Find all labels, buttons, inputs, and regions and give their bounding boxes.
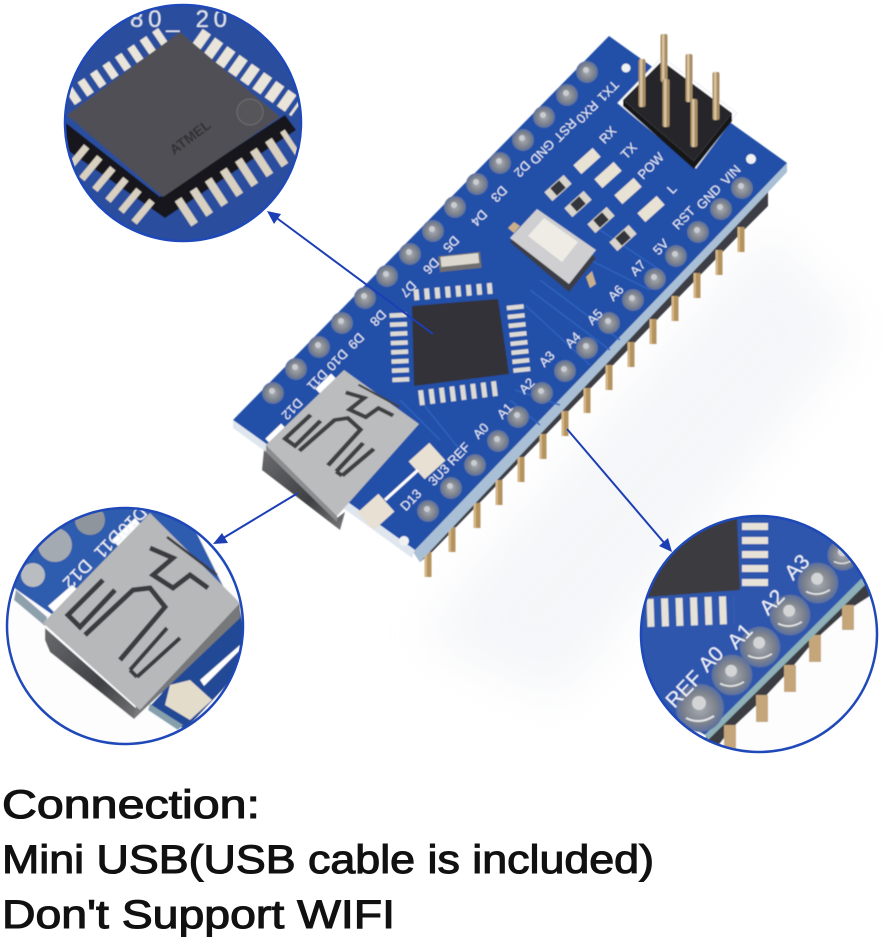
leg shadows	[60, 115, 296, 218]
top row pin labels: D3	[488, 183, 510, 205]
bottom row pin labels: A1	[494, 400, 516, 422]
bottom row pin labels: RST	[669, 203, 698, 232]
top row pin labels: TX1	[595, 77, 622, 105]
legs	[75, 142, 293, 219]
bottom row pin labels: A4	[562, 329, 584, 351]
bottom row pin labels: A3	[536, 348, 558, 370]
board top	[233, 36, 787, 550]
solder holes	[38, 528, 72, 562]
top row pin labels: D2	[511, 158, 533, 180]
white background	[14, 533, 242, 730]
LEDs	[573, 148, 665, 222]
white pad marks	[47, 584, 77, 612]
reset button	[508, 209, 596, 292]
bottom row pin labels: D13	[397, 486, 424, 514]
top row pin labels: RST	[551, 116, 580, 145]
connector front	[45, 628, 140, 719]
board side edge	[412, 163, 787, 562]
chip marking: ATMEL	[166, 116, 214, 158]
labels: A3	[780, 550, 815, 585]
LED labels: RX	[596, 123, 620, 147]
Nano board photo	[233, 34, 787, 577]
main chip	[412, 299, 509, 386]
labels: REF	[661, 666, 707, 713]
circle outline	[65, 5, 301, 241]
chip dent	[237, 99, 263, 125]
bottom row pin labels: 5V	[650, 236, 672, 258]
lower right board edge and solder tab	[150, 610, 242, 728]
bottom row pin labels: GND	[693, 181, 724, 212]
LED labels	[596, 123, 680, 197]
pad rows	[70, 35, 297, 108]
top row pin labels: D10	[324, 346, 351, 374]
bottom row pin labels: 3U3	[425, 461, 452, 489]
circle outline	[7, 508, 243, 744]
arrow: pins to right circle	[567, 429, 672, 552]
pin housing	[412, 178, 768, 562]
top row pin labels: D8	[367, 307, 389, 329]
circle: USB detail	[6, 506, 244, 746]
edge stripe	[705, 577, 868, 740]
circle outline	[641, 516, 877, 752]
bottom row pin labels: A7	[627, 257, 649, 279]
labels: D10	[114, 502, 151, 540]
top row pin labels: D7	[397, 278, 419, 300]
circle: chip detail	[60, 0, 310, 245]
arrow: chip to top-left circle	[267, 211, 433, 334]
pin legs	[724, 605, 854, 750]
caption line 3: Don't Support WIFI	[2, 893, 395, 937]
top row solder holes	[262, 61, 598, 404]
board top	[14, 509, 224, 694]
labels	[661, 550, 815, 713]
traces	[400, 230, 660, 450]
top row pin labels: GND	[527, 137, 558, 168]
LED labels: TX	[618, 139, 640, 162]
chip	[640, 518, 740, 597]
circle: pins detail	[630, 510, 883, 760]
connector slots	[68, 537, 217, 677]
crystal	[438, 252, 482, 272]
bottom row pin labels: A0	[470, 420, 492, 442]
labels: A1	[723, 619, 758, 654]
top row pin labels: D5	[440, 233, 462, 255]
board silkscreen text: 80_ 20	[130, 6, 227, 33]
6-pin header	[618, 34, 737, 169]
pads	[647, 523, 755, 613]
caption line 2: Mini USB(USB cable is included)	[2, 838, 654, 882]
USB connector	[262, 370, 445, 530]
bottom row pin labels: A6	[605, 282, 627, 304]
board shadow	[420, 230, 860, 700]
main chip pads	[398, 288, 522, 398]
caption line 1: Connection:	[2, 783, 260, 827]
labels: A2	[755, 585, 790, 620]
chip body	[67, 32, 280, 197]
top row pin labels: D6	[420, 255, 442, 277]
LED labels: L	[664, 181, 680, 197]
LED labels: POW	[635, 149, 667, 182]
arrow: USB to left circle	[213, 493, 298, 544]
caption text	[2, 783, 654, 937]
top row pin labels	[279, 77, 622, 423]
solder holes	[676, 684, 724, 732]
resistors	[544, 175, 637, 251]
top row pin labels: D12	[279, 395, 306, 423]
top row pin labels: D9	[345, 330, 367, 352]
labels: D12	[59, 555, 96, 593]
circuit board background	[66, 6, 300, 240]
top row pin labels: D4	[468, 207, 490, 229]
labels: D11	[90, 526, 127, 563]
bottom row solder holes	[417, 177, 753, 522]
bottom row pin labels	[397, 162, 744, 514]
top row pin labels: D11	[304, 367, 331, 394]
labels: A0	[694, 642, 729, 677]
top row pin labels: RX0	[573, 98, 601, 126]
bottom pin legs	[424, 227, 744, 577]
white background	[693, 592, 870, 748]
connector top face	[43, 513, 240, 710]
bottom row pin labels: VIN	[718, 162, 744, 188]
bottom row pin labels: REF	[444, 439, 473, 468]
bottom row pin labels: A5	[584, 306, 606, 328]
mounting holes	[399, 64, 756, 546]
board top	[642, 517, 862, 736]
housing	[705, 580, 870, 750]
bottom row pin labels: A2	[516, 375, 538, 397]
labels	[62, 510, 148, 588]
